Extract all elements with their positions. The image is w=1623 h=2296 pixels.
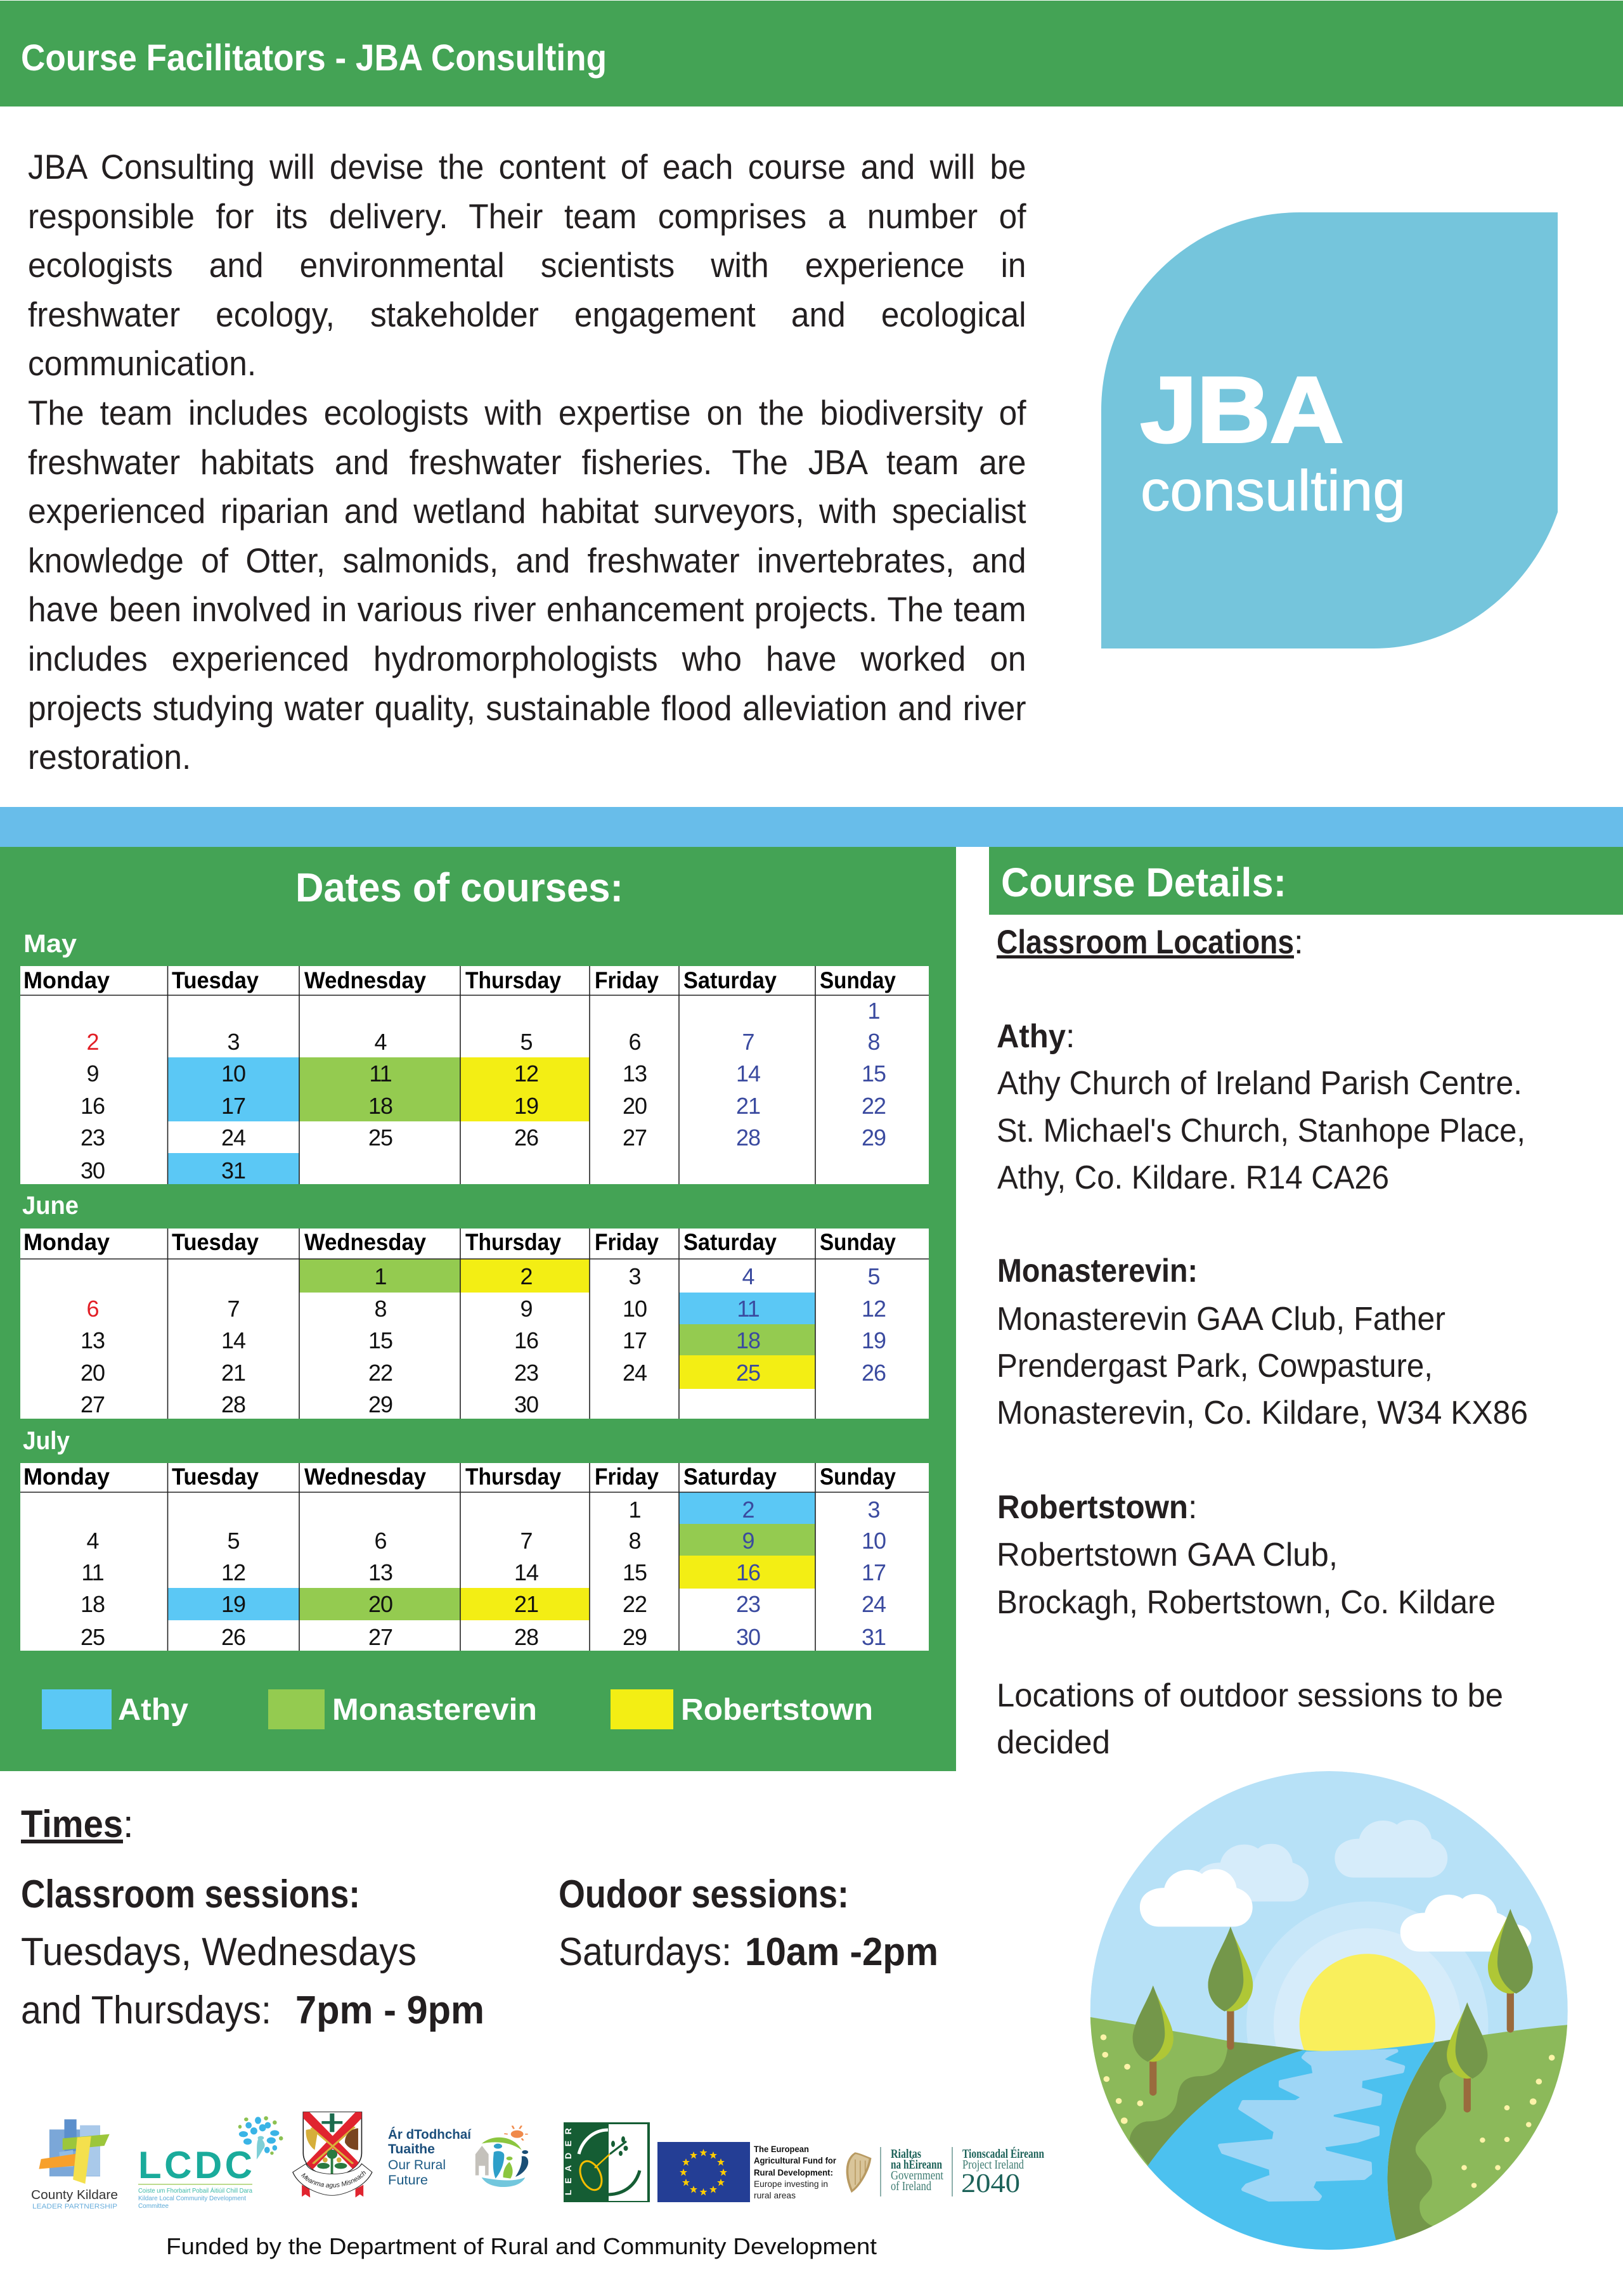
calendar: July: 27 [368, 1624, 392, 1650]
calendar: July: 22 [623, 1591, 647, 1617]
logo: LCDC: Kildare Local Community Development [138, 2195, 246, 2202]
text block: JBA description: JBA Consulting will devise the content of each course and will be [28, 147, 1026, 186]
logo: JBA consulting [1101, 212, 1558, 648]
calendar: July: 2 [742, 1497, 754, 1523]
logo: Our Rural Future [388, 2125, 528, 2188]
calendar: May: 10 [221, 1061, 245, 1087]
calendar: June: 30 [514, 1391, 538, 1417]
text block: times: 10am -2pm [745, 1930, 938, 1974]
calendar: June: Friday [595, 1229, 659, 1255]
text block: times: Oudoor sessions: [559, 1873, 849, 1916]
calendar: May: 17 [221, 1093, 245, 1119]
legend: locations: Robertstown [681, 1693, 873, 1727]
text block: times: 7pm - 9pm [295, 1989, 484, 2032]
calendar: May: 22 [862, 1093, 886, 1119]
calendar: June: 26 [862, 1360, 886, 1386]
legend: locations: Athy [118, 1693, 188, 1727]
calendar: June: 13 [81, 1327, 105, 1353]
calendar: June: 6 [86, 1296, 99, 1322]
text block: JBA description: freshwater ecology, stakeholder engagement and ecological [28, 295, 1026, 334]
calendar: July: 8 [628, 1528, 641, 1554]
calendar: June: 9 [520, 1296, 533, 1322]
calendar: June: 29 [368, 1391, 392, 1417]
header bar: course details: Course Details: [1001, 860, 1286, 905]
calendar: May: 14 [736, 1061, 760, 1087]
calendar: July: 15 [623, 1559, 647, 1585]
text block: classroom locations: : [1294, 924, 1303, 961]
calendar: July: 19 [221, 1591, 245, 1617]
logo: Government of Ireland and Project Ireland 2040: of Ireland [891, 2179, 931, 2193]
text block: classroom locations: Robertstown GAA Club, [997, 1537, 1338, 1573]
calendar: June: 25 [736, 1360, 760, 1386]
calendar: June: 21 [221, 1360, 245, 1386]
calendar: June: 22 [368, 1360, 392, 1386]
calendar: July: Wednesday [304, 1464, 426, 1490]
text block: times: Times [21, 1803, 123, 1845]
calendar: May: Thursday [465, 967, 561, 993]
calendar: June: 3 [628, 1263, 641, 1289]
calendar: June: 12 [862, 1296, 886, 1322]
text block: times: Tuesdays, Wednesdays [21, 1930, 417, 1974]
text block: JBA description: restoration. [28, 737, 191, 777]
logo: LEADER [563, 2122, 650, 2202]
calendar: June: Tuesday [172, 1229, 259, 1255]
heading: July: July [23, 1427, 70, 1455]
calendar: May: 27 [623, 1125, 647, 1151]
calendar: June: Thursday [465, 1229, 561, 1255]
calendar: May: 13 [623, 1061, 647, 1087]
text block: classroom locations: decided [997, 1724, 1110, 1761]
calendar: July: 1 [628, 1497, 641, 1523]
calendar: July: 17 [862, 1559, 886, 1585]
calendar: June: 10 [623, 1296, 647, 1322]
calendar: July: Monday [23, 1464, 110, 1490]
logo: JBA consulting: JBA [1141, 358, 1343, 462]
calendar: May: 6 [628, 1029, 641, 1055]
calendar: June: 23 [514, 1360, 538, 1386]
calendar: July: 12 [221, 1559, 245, 1585]
calendar: June: 24 [623, 1360, 647, 1386]
calendar: July: 4 [86, 1528, 99, 1554]
text block: JBA description: ecologists and environmental scientists with experience in [28, 245, 1026, 285]
calendar: July: 5 [227, 1528, 240, 1554]
logo: Our Rural Future: Future [388, 2173, 428, 2188]
calendar: June: 20 [81, 1360, 105, 1386]
logo: County Kildare LEADER Partnership [31, 2119, 118, 2210]
calendar: May: 31 [221, 1158, 245, 1183]
text block: classroom locations: Robertstown [997, 1489, 1188, 1526]
calendar: May: 19 [514, 1093, 538, 1119]
calendar: June: 4 [742, 1263, 754, 1289]
panel: dates of courses [0, 847, 956, 1771]
logo: LCDC: Committee [138, 2202, 169, 2210]
heading: June: June [22, 1192, 79, 1220]
calendar: June: 2 [520, 1263, 533, 1289]
logo: Government of Ireland and Project Ireland 2040: Tionscadal Éireann [962, 2146, 1044, 2161]
calendar: June [20, 1229, 929, 1419]
calendar: June: 18 [736, 1327, 760, 1353]
calendar: July: 24 [862, 1591, 886, 1617]
calendar: May: Tuesday [172, 967, 259, 993]
illustration: river landscape with sun [1090, 1771, 1568, 2250]
calendar: July: 16 [736, 1559, 760, 1585]
calendar: May: 8 [867, 1029, 880, 1055]
calendar: May: 20 [623, 1093, 647, 1119]
calendar: May [20, 966, 929, 1184]
calendar: July: 3 [867, 1497, 880, 1523]
calendar: June: 28 [221, 1391, 245, 1417]
calendar: June: 16 [514, 1327, 538, 1353]
text block: times [21, 1803, 938, 2032]
calendar: June: 1 [374, 1263, 387, 1289]
calendar: May: Wednesday [304, 967, 426, 993]
calendar: May: 3 [227, 1029, 240, 1055]
calendar: May: 30 [81, 1158, 105, 1183]
logo: Government of Ireland and Project Ireland 2040: Project Ireland [962, 2158, 1024, 2172]
text block: JBA description: communication. [28, 344, 256, 383]
calendar: July: Saturday [683, 1464, 777, 1490]
calendar: May: 29 [862, 1125, 886, 1151]
calendar: July: Tuesday [172, 1464, 259, 1490]
text block: classroom locations: Classroom Locations [997, 924, 1294, 961]
text block: European Agricultural Fund: The European [754, 2144, 809, 2154]
text block: JBA description: projects studying water quality, sustainable flood alleviation and river [28, 688, 1026, 728]
logo: Government of Ireland and Project Ireland 2040: Rialtas [891, 2147, 921, 2161]
calendar: May: 7 [742, 1029, 754, 1055]
calendar: May: 21 [736, 1093, 760, 1119]
heading: dates of courses: Dates of courses: [295, 865, 623, 910]
text block: times: Saturdays: [559, 1930, 732, 1974]
legend: locations: Monasterevin [332, 1693, 537, 1727]
text block: times: Classroom sessions: [21, 1873, 360, 1916]
calendar: May: 1 [867, 998, 880, 1024]
text block: JBA description: freshwater habitats and freshwater fisheries. The JBA team are [28, 442, 1026, 482]
calendar: May: 25 [368, 1125, 392, 1151]
calendar: July: 11 [81, 1559, 104, 1585]
calendar: May: 12 [514, 1061, 538, 1087]
header bar: course details [989, 847, 1623, 915]
calendar: June: 8 [374, 1296, 387, 1322]
calendar: May: 2 [86, 1029, 99, 1055]
calendar: July: Friday [595, 1464, 659, 1490]
text block: JBA description: The team includes ecologists with expertise on the biodiversity of [28, 393, 1026, 432]
logo: Kildare coat of arms: Meanma agus Misneach [301, 2171, 366, 2189]
calendar: July: 23 [736, 1591, 760, 1617]
logo: Our Rural Future: Our Rural [388, 2158, 446, 2172]
text block: classroom locations: Brockagh, Robertstown, Co. Kildare [997, 1584, 1496, 1621]
calendar: July: 29 [623, 1624, 647, 1650]
calendar: June: 15 [368, 1327, 392, 1353]
calendar: July: 28 [514, 1624, 538, 1650]
calendar: July: 21 [514, 1591, 538, 1617]
calendar: June: 17 [623, 1327, 647, 1353]
text block: classroom locations: Locations of outdoor sessions to be [997, 1677, 1503, 1714]
text block: JBA description: responsible for its delivery. Their team comprises a number of [28, 197, 1026, 236]
calendar: July: 7 [520, 1528, 533, 1554]
calendar: May: 9 [86, 1061, 99, 1087]
calendar: June: 19 [862, 1327, 886, 1353]
logo: Government of Ireland and Project Ireland 2040: na hÉireann [891, 2157, 942, 2172]
calendar: June: Sunday [820, 1229, 896, 1255]
text block: JBA description: have been involved in various river enhancement projects. The team [28, 590, 1026, 629]
logo: County Kildare LEADER Partnership: LEADER PARTNERSHIP [32, 2203, 117, 2210]
logo: EU flag [657, 2142, 750, 2202]
calendar: May: 24 [221, 1125, 245, 1151]
text block: classroom locations: Monasterevin: [997, 1253, 1198, 1289]
calendar: July: 9 [742, 1528, 754, 1554]
calendar: July: 25 [81, 1624, 105, 1650]
calendar: July: 26 [221, 1624, 245, 1650]
text block: European Agricultural Fund: rural areas [754, 2190, 796, 2200]
calendar: June: Wednesday [304, 1229, 426, 1255]
calendar: May: 4 [374, 1029, 387, 1055]
calendar: July: 18 [81, 1591, 105, 1617]
calendar: July: 10 [862, 1528, 886, 1554]
calendar: May: 16 [81, 1093, 105, 1119]
calendar: May: 5 [520, 1029, 533, 1055]
text block: times: and Thursdays: [21, 1989, 271, 2032]
logo: LCDC: Coiste um Fhorbairt Pobail Áitiúil Chill Dara [138, 2186, 252, 2195]
logo: County Kildare LEADER Partnership: County Kildare [31, 2188, 118, 2202]
calendar: July: 30 [736, 1624, 760, 1650]
logo: Government of Ireland and Project Ireland 2040 [847, 2146, 1044, 2198]
calendar: May: 18 [368, 1093, 392, 1119]
title: course facilitators: Course Facilitators - JBA Consulting [21, 37, 607, 79]
logo: LCDC: LCDC [138, 2144, 252, 2186]
text block: JBA description: includes experienced hydromorphologists who have worked on [28, 639, 1026, 678]
text block: classroom locations: Athy [997, 1018, 1066, 1055]
blue divider band [0, 807, 1623, 847]
calendar: June: Saturday [683, 1229, 777, 1255]
calendar: June: 11 [737, 1296, 760, 1322]
logo: Our Rural Future: Ár dTodhchaí [388, 2127, 472, 2142]
heading: May: May [23, 930, 77, 958]
text block: JBA description: experienced riparian and wetland habitat surveyors, with specialist [28, 491, 1026, 531]
calendar: May: 11 [369, 1061, 392, 1087]
text block: classroom locations: Monasterevin GAA Club, Father [997, 1301, 1445, 1338]
text block: European Agricultural Fund: Agricultural Fund for [754, 2155, 837, 2165]
legend: locations [42, 1689, 873, 1729]
calendar: May: Friday [595, 967, 659, 993]
text block: European Agricultural Fund: Rural Development: [754, 2167, 833, 2177]
calendar: June: 5 [867, 1263, 880, 1289]
calendar: July: Sunday [820, 1464, 896, 1490]
calendar: May: 28 [736, 1125, 760, 1151]
calendar: July: 31 [862, 1624, 886, 1650]
text block: classroom locations: St. Michael's Church, Stanhope Place, [997, 1113, 1525, 1149]
calendar: July: Thursday [465, 1464, 561, 1490]
funding statement: Funded by the Department of Rural and Community Development [166, 2233, 877, 2259]
text block: JBA description [28, 147, 1026, 777]
calendar: May: Saturday [683, 967, 777, 993]
text block: classroom locations: Prendergast Park, Cowpasture, [997, 1348, 1433, 1384]
calendar: May: 23 [81, 1125, 105, 1151]
calendar: June: 14 [221, 1327, 245, 1353]
calendar: July: 13 [368, 1559, 392, 1585]
calendar: May: Sunday [820, 967, 896, 993]
logo: LEADER: LEADER [563, 2128, 573, 2195]
text block: classroom locations: : [1066, 1018, 1075, 1055]
logo: Government of Ireland and Project Ireland 2040: 2040 [961, 2169, 1020, 2198]
calendar: July: 6 [374, 1528, 387, 1554]
text block: classroom locations [997, 924, 1528, 1761]
logo: JBA consulting: consulting [1141, 460, 1406, 523]
calendar: July: 20 [368, 1591, 392, 1617]
calendar: June: Monday [23, 1229, 110, 1255]
text block: JBA description: knowledge of Otter, salmonids, and freshwater invertebrates, and [28, 541, 1026, 580]
text block: classroom locations: Monasterevin, Co. Kildare, W34 KX86 [997, 1395, 1528, 1431]
text block: classroom locations: : [1188, 1489, 1197, 1526]
calendar: July [20, 1463, 929, 1651]
logo: Our Rural Future: Tuaithe [388, 2142, 435, 2157]
calendar: June: 27 [81, 1391, 105, 1417]
text block: classroom locations: Athy Church of Ireland Parish Centre. [997, 1065, 1522, 1102]
calendar: May: 15 [862, 1061, 886, 1087]
text block: classroom locations: Athy, Co. Kildare. R14 CA26 [997, 1159, 1389, 1196]
calendar: June: 7 [227, 1296, 240, 1322]
calendar: May: Monday [23, 967, 110, 993]
text block: European Agricultural Fund [754, 2144, 837, 2200]
calendar: May: 26 [514, 1125, 538, 1151]
calendar: July: 14 [514, 1559, 538, 1585]
text block: European Agricultural Fund: Europe investing in [754, 2179, 828, 2189]
logo: Government of Ireland and Project Ireland 2040: Government [891, 2169, 943, 2183]
text block: times: : [123, 1803, 134, 1845]
logo: Kildare coat of arms [292, 2112, 373, 2198]
header bar: course facilitators [0, 1, 1623, 106]
logo: LCDC [138, 2116, 283, 2210]
